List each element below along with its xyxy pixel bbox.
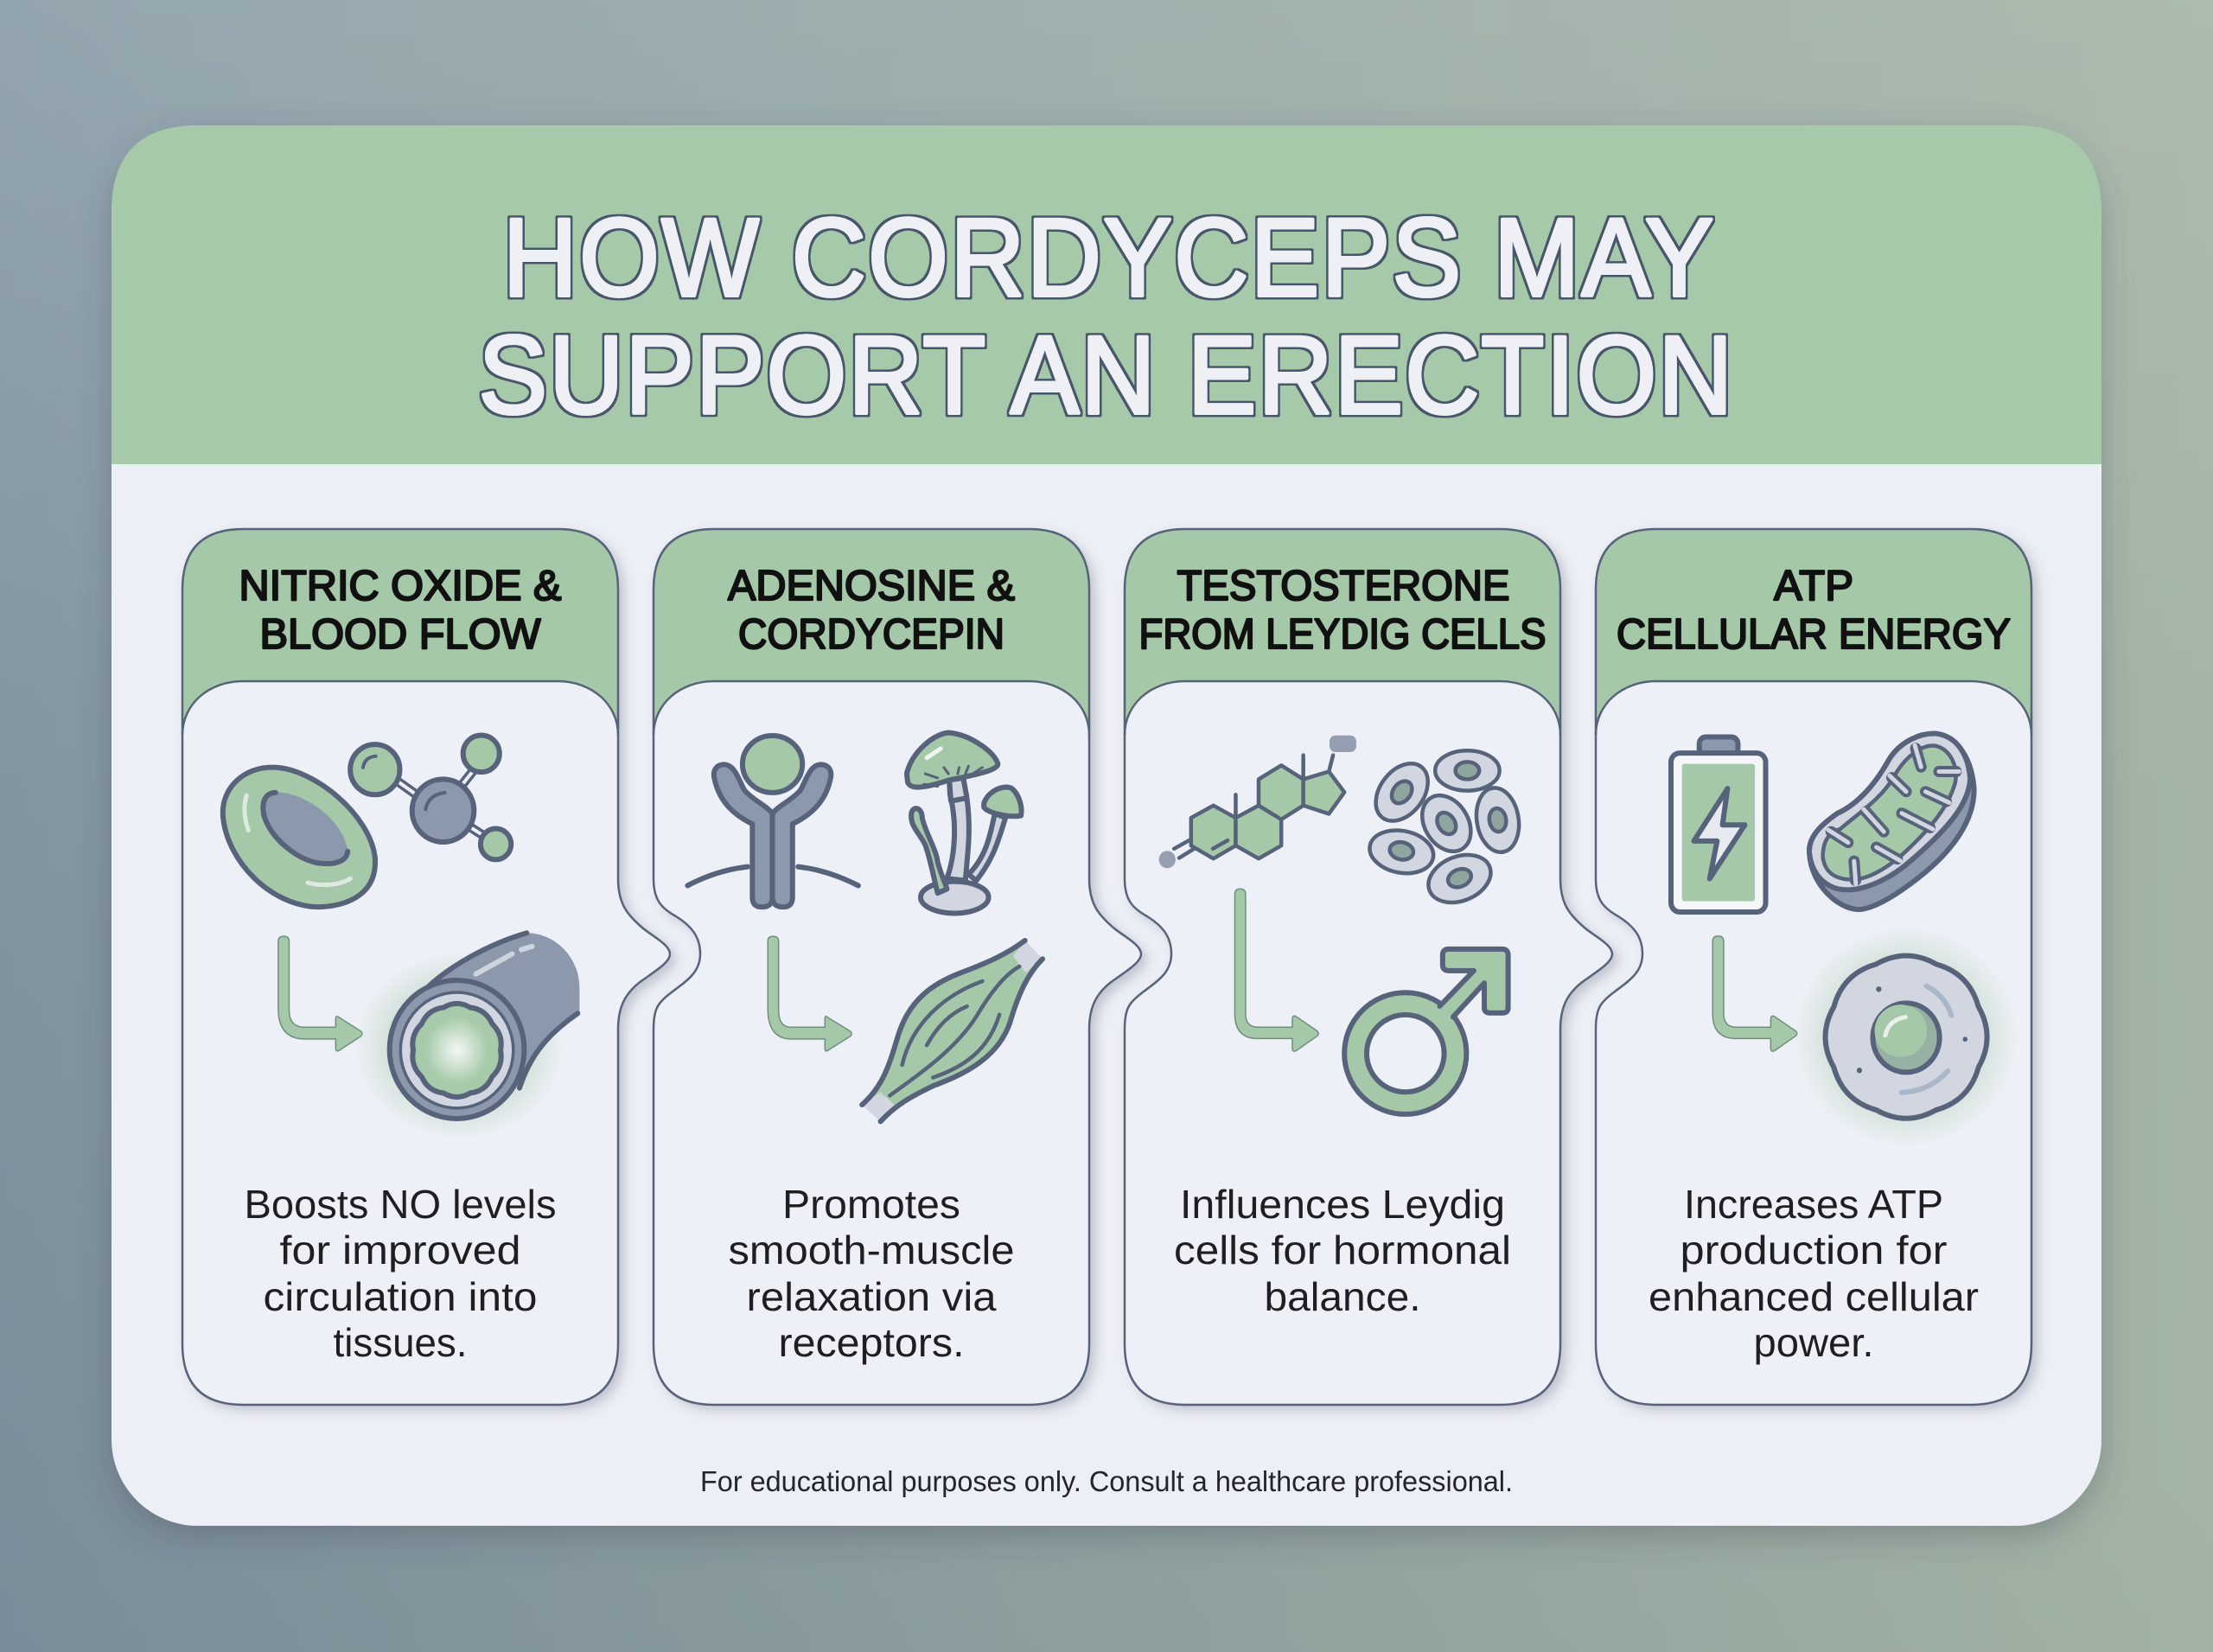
header band (112, 125, 2101, 464)
icon: mitochondrion (1809, 734, 1974, 909)
heading (728, 563, 1015, 658)
icon: glow (1793, 926, 2019, 1148)
heading: BLOOD FLOW (259, 611, 541, 658)
body text: smooth-muscle (728, 1228, 1015, 1272)
panel: adenosine and cordycepin (654, 529, 1141, 1405)
arrow (768, 936, 851, 1051)
main card (112, 125, 2101, 1526)
body text (244, 1182, 557, 1365)
title: HOW CORDYCEPS MAY (503, 196, 1713, 320)
body text: circulation into (263, 1274, 538, 1319)
icon: glow (354, 952, 565, 1140)
icon: cell with nucleus (1826, 956, 1987, 1119)
body text: power. (1753, 1320, 1874, 1365)
heading (1139, 563, 1546, 658)
body text: cells for hormonal (1174, 1228, 1511, 1272)
icon: leydig cells (1365, 750, 1524, 911)
heading (239, 563, 562, 658)
icon: smooth muscle (862, 941, 1043, 1121)
icon: mushrooms (907, 733, 1022, 913)
panel: ATP cellular energy (1596, 529, 2031, 1405)
icons (687, 733, 1043, 1121)
icon: steroid molecule (1159, 736, 1356, 868)
body text: Increases ATP (1684, 1182, 1943, 1227)
body text: tissues. (334, 1320, 467, 1365)
body text (728, 1182, 1015, 1365)
heading: CORDYCEPIN (738, 611, 1004, 658)
title: SUPPORT AN ERECTION (479, 314, 1732, 437)
body text (1174, 1182, 1511, 1319)
icon: male symbol (1344, 949, 1508, 1114)
body text: receptors. (778, 1320, 965, 1365)
icon: blood vessel (390, 933, 579, 1119)
body text: Promotes (782, 1182, 960, 1227)
icon: molecule (350, 735, 511, 859)
body text: for improved (280, 1228, 520, 1272)
icon: receptor (687, 736, 858, 907)
icons (1159, 736, 1524, 1114)
body text: Influences Leydig (1180, 1182, 1505, 1227)
body text: Boosts NO levels (244, 1182, 557, 1227)
heading: ATP (1774, 563, 1853, 609)
arrow (1234, 889, 1318, 1051)
panel: nitric oxide and blood flow (182, 529, 670, 1405)
heading: NITRIC OXIDE & (239, 563, 562, 609)
panel: testosterone from leydig cells (1125, 529, 1612, 1405)
body text: production for (1680, 1228, 1947, 1272)
heading: FROM LEYDIG CELLS (1139, 611, 1546, 658)
body text: enhanced cellular (1649, 1274, 1979, 1319)
heading (1617, 563, 2011, 658)
heading: ADENOSINE & (728, 563, 1015, 609)
icons (223, 735, 579, 1140)
icon: battery (1671, 737, 1766, 912)
footer disclaimer: For educational purposes only. Consult a healthcare professional. (700, 1465, 1513, 1497)
title (479, 196, 1732, 437)
icons (1671, 734, 2019, 1148)
heading: TESTOSTERONE (1177, 563, 1509, 609)
heading: CELLULAR ENERGY (1617, 611, 2011, 658)
body text: balance. (1264, 1274, 1421, 1319)
arrow (1712, 936, 1797, 1051)
body text (1649, 1182, 1979, 1365)
arrow (278, 936, 362, 1051)
icon: red blood cell (223, 768, 375, 907)
body text: relaxation via (747, 1274, 997, 1319)
